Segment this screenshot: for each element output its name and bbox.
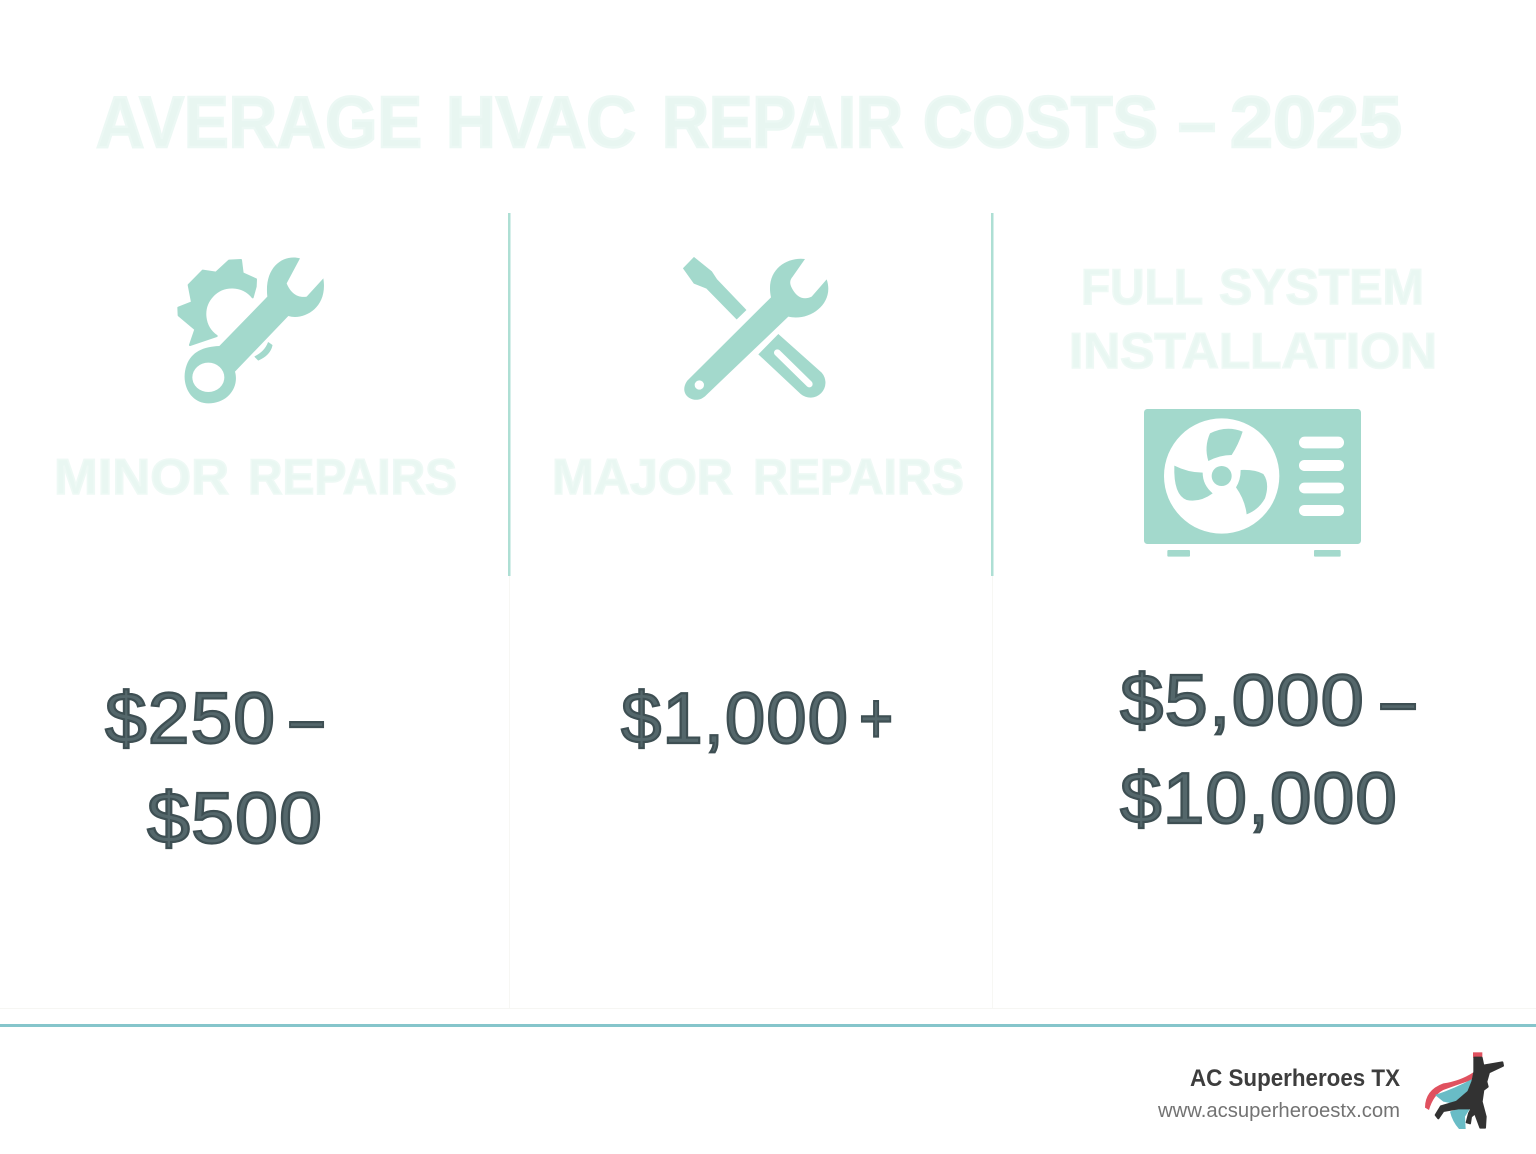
heading: major repairs bbox=[552, 449, 964, 505]
panel: minor repairs bbox=[54, 258, 457, 859]
heading: full system installation bbox=[1069, 259, 1437, 379]
heading: full system installation: INSTALLATION bbox=[1069, 323, 1437, 379]
heading: minor repairs: MINOR bbox=[54, 449, 229, 505]
icon: outdoor AC unit bbox=[1144, 409, 1361, 557]
price: full system installation: $10,000 bbox=[1120, 759, 1398, 839]
heading: major repairs: REPAIRS bbox=[753, 449, 964, 505]
icon: superhero logo bbox=[1425, 1052, 1503, 1129]
price: minor repairs: – bbox=[290, 679, 324, 759]
panel: full system installation bbox=[1069, 259, 1437, 839]
title: REPAIR bbox=[662, 83, 903, 163]
title bbox=[96, 83, 1402, 163]
price: full system installation bbox=[1120, 661, 1416, 839]
heading: full system installation: SYSTEM bbox=[1219, 259, 1424, 315]
price: major repairs: + bbox=[859, 679, 894, 759]
brand url: www.acsuperheroestx.com bbox=[1157, 1100, 1400, 1122]
title: HVAC bbox=[446, 83, 636, 163]
price: full system installation: – bbox=[1381, 661, 1416, 741]
price: minor repairs: $500 bbox=[147, 779, 323, 859]
title: 2025 bbox=[1230, 83, 1402, 163]
title: COSTS bbox=[923, 83, 1158, 163]
icon: crossed wrench and screwdriver bbox=[683, 257, 828, 400]
price: minor repairs bbox=[105, 679, 324, 859]
heading: major repairs: MAJOR bbox=[552, 449, 733, 505]
title: AVERAGE bbox=[96, 83, 422, 163]
footer brand bbox=[1157, 1052, 1503, 1129]
panel: major repairs bbox=[552, 257, 964, 759]
heading: minor repairs: REPAIRS bbox=[248, 449, 457, 505]
price: full system installation: $5,000 bbox=[1120, 661, 1365, 741]
price: minor repairs: $250 bbox=[105, 679, 276, 759]
heading: minor repairs bbox=[54, 449, 457, 505]
price: major repairs: $1,000 bbox=[621, 679, 849, 759]
icon: gear and wrench bbox=[178, 258, 324, 403]
brand name: AC Superheroes TX bbox=[1190, 1065, 1400, 1092]
title: – bbox=[1178, 83, 1216, 163]
heading: full system installation: FULL bbox=[1081, 259, 1203, 315]
